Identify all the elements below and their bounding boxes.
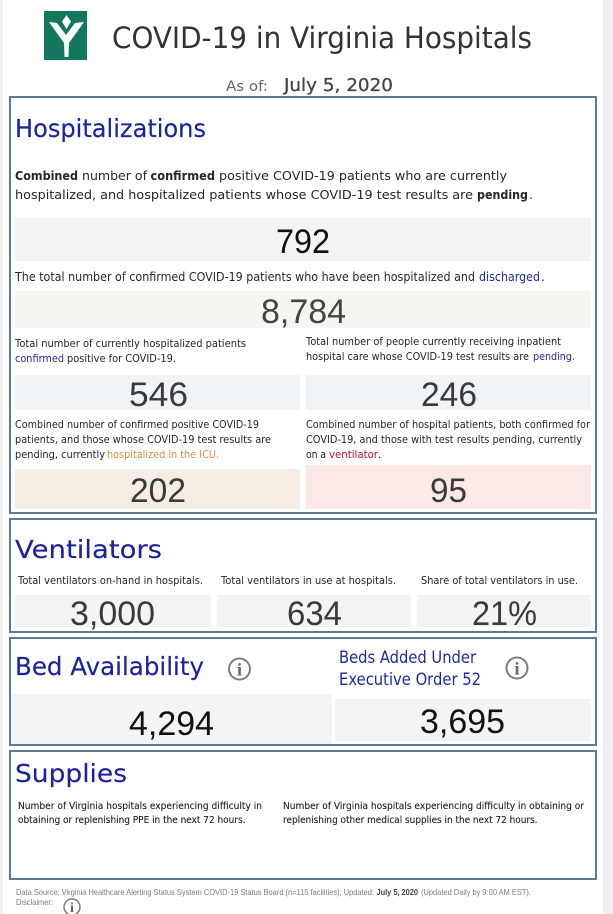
- stat: discharged 8,784: [15, 291, 591, 331]
- panel: supplies: [10, 751, 596, 879]
- stat: beds 4,294: [11, 694, 332, 744]
- footer: data source: [16, 887, 531, 907]
- heading: beds added under executive order 52: Executive Order 52: [339, 670, 481, 689]
- text block: other supplies difficulty: [283, 801, 585, 826]
- label: share: Share of total ventilators in use.: [421, 575, 578, 587]
- text block: pending description: Total number of people currently receiving inpatient: [305, 336, 561, 348]
- text block: combined description: positive COVID-19 patients who are currently: [219, 168, 508, 183]
- footer: data source: Data Source: Virginia Healthcare Alerting Status System COVID-19 Status Board (n=115 facilities); Updated:: [16, 887, 374, 897]
- stat: pending 246: [306, 375, 591, 414]
- as-of date: As of:: [226, 79, 268, 95]
- as-of date: July 5, 2020: [283, 76, 393, 96]
- text block: confirmed description: confirmed: [15, 353, 64, 365]
- heading: bed availability: Bed Availability: [15, 652, 204, 681]
- text block: confirmed description: Total number of currently hospitalized patients: [14, 338, 246, 350]
- text block: ventilator description: [306, 419, 591, 461]
- heading: beds added under executive order 52: [339, 648, 481, 689]
- title: COVID-19 in Virginia Hospitals: [112, 21, 532, 55]
- text block: pending description: pending.: [533, 351, 575, 363]
- text block: ICU description: hospitalized in the ICU.: [107, 449, 219, 461]
- stat: discharged 8,784: 8,784: [261, 293, 346, 331]
- stat: on-hand 3,000: 3,000: [70, 595, 155, 633]
- stat: beds added 3,695: [335, 699, 591, 741]
- label: in use: Total ventilators in use at hospitals.: [220, 575, 396, 587]
- stat: ICU 202: 202: [130, 472, 186, 510]
- text block: pending description: hospital care whose COVID-19 test results are: [306, 351, 529, 363]
- text block: PPE difficulty: Number of Virginia hospitals experiencing difficulty in: [18, 801, 262, 812]
- stat: share 21%: [417, 595, 591, 633]
- stat: on ventilator 95: 95: [430, 472, 467, 510]
- text block: combined description: [15, 168, 533, 202]
- text block: confirmed description: [14, 338, 246, 365]
- stat: in use 634: 634: [287, 595, 342, 633]
- stat: on-hand 3,000: [15, 595, 211, 633]
- text block: discharged description: The total number of confirmed COVID-19 patients who have been hospitalized and: [14, 269, 475, 284]
- text block: ICU description: patients, and those whose COVID-19 test results are: [15, 434, 271, 446]
- text block: ventilator description: COVID-19, and those with test results pending, currently: [306, 434, 582, 446]
- label: on-hand: Total ventilators on-hand in hospitals.: [17, 575, 203, 587]
- heading: beds added under executive order 52: Beds Added Under: [339, 648, 476, 667]
- heading: hospitalizations: Hospitalizations: [15, 114, 206, 143]
- panel: hospitalizations: [10, 97, 596, 513]
- footer: data source: Disclaimer:: [16, 897, 53, 907]
- icon: info bed availability: [229, 658, 250, 680]
- as-of date: [226, 76, 393, 96]
- footer: data source: (Updated Daily by 9:00 AM EST).: [421, 887, 531, 897]
- text block: other supplies difficulty: Number of Virginia hospitals experiencing difficulty in obtaining or: [283, 801, 585, 812]
- text block: combined description: confirmed: [150, 168, 215, 183]
- text block: combined description: Combined: [15, 168, 78, 183]
- stat: on ventilator 95: [306, 465, 591, 510]
- text block: PPE difficulty: obtaining or replenishing PPE in the next 72 hours.: [18, 815, 246, 826]
- text block: ICU description: pending, currently: [15, 449, 105, 461]
- heading: supplies: Supplies: [15, 759, 127, 788]
- icon: info bed availability: i: [237, 660, 242, 680]
- footer: data source: July 5, 2020: [376, 887, 418, 897]
- stat: pending 246: 246: [421, 376, 477, 414]
- stat: total hospitalized 792: 792: [276, 223, 330, 261]
- icon: info beds added: [506, 658, 528, 678]
- text block: ventilator description: on a: [306, 449, 326, 461]
- stat: confirmed 546: [15, 375, 300, 414]
- text block: ventilator description: Combined number of hospital patients, both confirmed for: [306, 419, 591, 431]
- stat: total hospitalized 792: [15, 218, 591, 261]
- text block: ICU description: Combined number of confirmed positive COVID-19: [15, 419, 259, 431]
- stat: share 21%: 21%: [472, 595, 537, 633]
- text block: discharged description: .: [541, 269, 545, 284]
- text block: ventilator description: .: [378, 449, 381, 461]
- text block: ventilator description: ventilator: [329, 449, 379, 461]
- icon: info beds added: i: [514, 658, 520, 678]
- stat: in use 634: [217, 595, 411, 633]
- stat: beds 4,294: 4,294: [129, 705, 214, 743]
- text block: combined description: number of: [82, 168, 148, 183]
- icon: info disclaimer: [64, 899, 80, 914]
- heading: ventilators: Ventilators: [15, 535, 162, 564]
- text block: combined description: pending: [477, 187, 528, 202]
- text block: combined description: .: [529, 187, 533, 202]
- stat: confirmed 546: 546: [129, 376, 188, 414]
- text block: pending description: [305, 336, 575, 363]
- stat: ICU 202: [15, 469, 300, 510]
- panel: ventilators: [10, 519, 596, 633]
- text block: discharged description: discharged: [479, 269, 540, 284]
- icon: hospital association logo: [44, 11, 87, 60]
- text block: PPE difficulty: [18, 801, 262, 826]
- panel: bed availability: [10, 638, 596, 745]
- text block: confirmed description: positive for COVID-19.: [67, 353, 176, 365]
- text block: other supplies difficulty: replenishing other medical supplies in the next 72 hours.: [283, 815, 538, 826]
- stat: beds added 3,695: 3,695: [420, 703, 505, 741]
- text block: ICU description: [15, 419, 271, 461]
- text block: combined description: hospitalized, and hospitalized patients whose COVID-19 test results are: [15, 187, 473, 202]
